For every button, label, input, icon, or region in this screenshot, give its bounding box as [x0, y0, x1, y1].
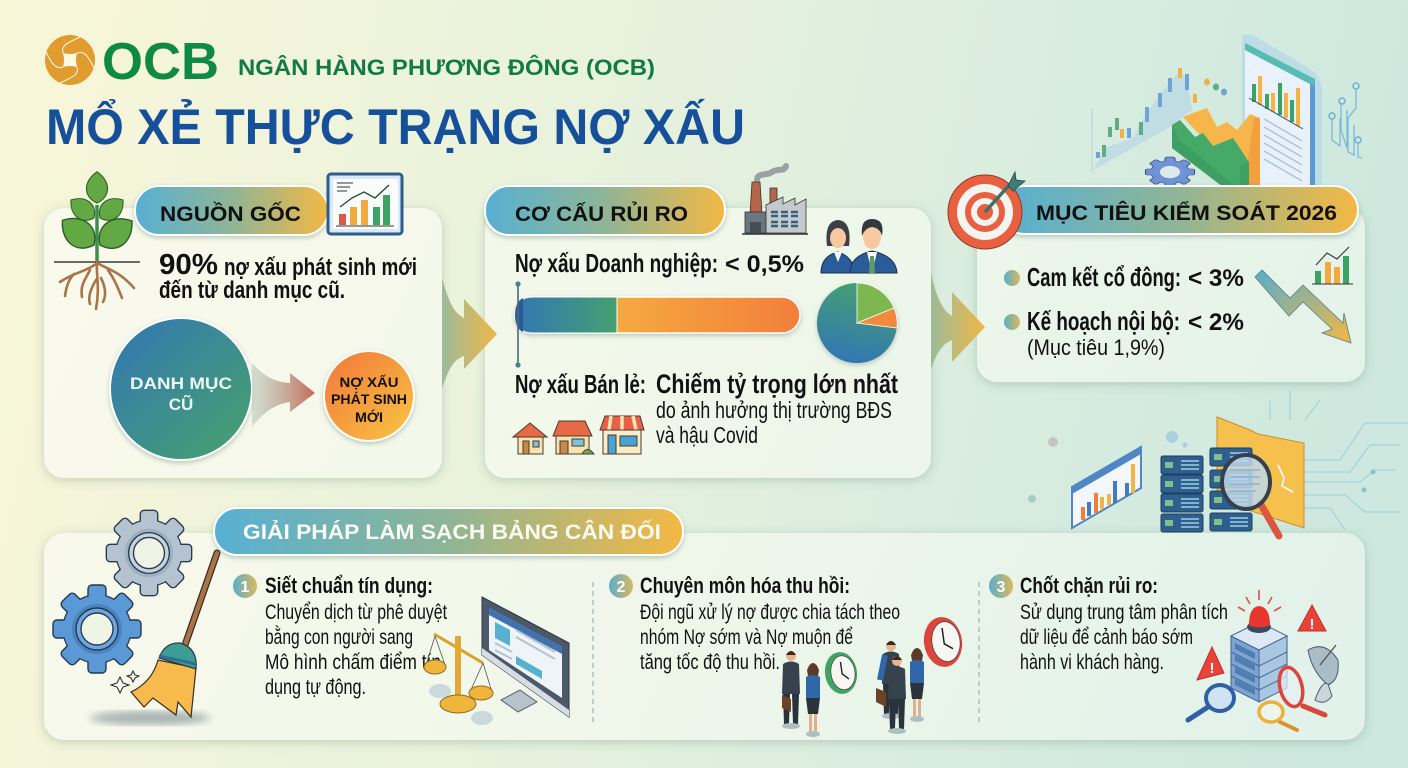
- arrow: cơ cấu to mục tiêu: [931, 273, 985, 370]
- step 1: siết chuẩn tín dụng: dụng tự động.: [265, 676, 366, 699]
- logo: OCB: OCB: [102, 33, 219, 91]
- icon: houses and shop: [513, 416, 644, 454]
- circle: nợ xấu phát sinh mới: PHÁT SINH: [331, 392, 407, 407]
- circle: nợ xấu phát sinh mới: [324, 351, 414, 441]
- pie chart: [817, 283, 897, 363]
- arrow: downward trend: [1255, 270, 1351, 343]
- step 1: siết chuẩn tín dụng: Siết chuẩn tín dụng:: [265, 573, 433, 598]
- step 2: chuyên môn hóa thu hồi: nhóm Nợ sớm và Nợ muộn để: [640, 626, 853, 649]
- panel: cơ cấu rủi ro: [485, 166, 931, 478]
- pill heading: giải pháp làm sạch bảng cân đối: GIẢI PHÁP LÀM SẠCH BẢNG CÂN ĐỐI: [243, 520, 661, 544]
- panel: nguồn gốc: [44, 172, 442, 478]
- text: nợ xấu bán lẻ: và hậu Covid: [656, 422, 758, 448]
- step 1: siết chuẩn tín dụng: Chuyển dịch từ phê duyệt: [265, 601, 447, 624]
- circle: nợ xấu phát sinh mới: MỚI: [355, 410, 383, 425]
- circle: danh mục cũ: DANH MỤC: [130, 374, 232, 393]
- icon: mini bar chart: [1312, 247, 1353, 284]
- circle: danh mục cũ: [110, 318, 252, 460]
- stacked bar: tỷ trọng nợ xấu: [515, 281, 800, 368]
- step 2: chuyên môn hóa thu hồi: Chuyên môn hóa thu hồi:: [640, 573, 850, 598]
- icon: factory: [742, 166, 808, 234]
- icon: alarm server and magnifiers: !: [1210, 660, 1214, 677]
- text: nợ xấu bán lẻ: [515, 369, 898, 448]
- panel: giải pháp: [44, 508, 1365, 740]
- step 3: chốt chặn rủi ro: hành vi khách hàng.: [1020, 651, 1164, 674]
- bullet: kế hoạch nội bộ: (Mục tiêu 1,9%): [1027, 335, 1165, 360]
- pill heading: mục tiêu kiểm soát 2026: [1000, 186, 1358, 234]
- illustration: analytics tablet and charts: [1092, 34, 1362, 190]
- step 2: chuyên môn hóa thu hồi: tăng tốc độ thu hồi.: [640, 651, 780, 674]
- arrow: danh mục cũ to nợ xấu mới: [252, 363, 315, 427]
- step 2: chuyên môn hóa thu hồi: 2: [617, 579, 626, 596]
- bullet: kế hoạch nội bộ: Kế hoạch nội bộ:: [1027, 306, 1180, 336]
- arrow: nguồn gốc to cơ cấu: [442, 278, 497, 388]
- divider: [592, 582, 594, 722]
- text: 90% statement: 90%: [159, 249, 218, 281]
- icon: target with dart: [948, 172, 1025, 249]
- step 2: chuyên môn hóa thu hồi: [609, 573, 900, 674]
- text: nợ xấu doanh nghiệp: Nợ xấu Doanh nghiệp:: [515, 248, 718, 278]
- circle: nợ xấu phát sinh mới: NỢ XẤU: [340, 375, 398, 390]
- step 1: siết chuẩn tín dụng: bằng con người sang: [265, 626, 413, 649]
- circle: danh mục cũ: CŨ: [169, 394, 193, 414]
- step 1: siết chuẩn tín dụng: Mô hình chấm điểm tín: [265, 651, 441, 674]
- icon: gears: [53, 510, 192, 673]
- icon: people and clocks: [782, 615, 965, 737]
- bank name: NGÂN HÀNG PHƯƠNG ĐÔNG (OCB): [238, 55, 655, 80]
- pill heading: cơ cấu rủi ro: [485, 186, 725, 235]
- pill heading: giải pháp làm sạch bảng cân đối: [214, 508, 683, 555]
- bullet: cam kết cổ đông: < 3%: [1188, 265, 1244, 292]
- text: 90% statement: [159, 249, 417, 304]
- step 3: chốt chặn rủi ro: Chốt chặn rủi ro:: [1020, 573, 1158, 598]
- pill heading: mục tiêu kiểm soát 2026: MỤC TIÊU KIỂM SOÁT 2026: [1036, 201, 1337, 225]
- text: 90% statement: đến từ danh mục cũ.: [159, 277, 345, 304]
- icon group: server folder and dashboard: [1028, 390, 1408, 536]
- pill heading: cơ cấu rủi ro: CƠ CẤU RỦI RO: [515, 202, 688, 226]
- step 1: siết chuẩn tín dụng: 1: [241, 579, 250, 596]
- step 3: chốt chặn rủi ro: 3: [997, 579, 1006, 596]
- icon: plant with roots: [54, 172, 140, 309]
- logo: OCB: [45, 33, 219, 91]
- text: nợ xấu bán lẻ: Nợ xấu Bán lẻ:: [515, 369, 646, 399]
- panel: mục tiêu kiểm soát: [948, 172, 1365, 382]
- pill heading: nguồn gốc: [135, 186, 328, 235]
- bullet: cam kết cổ đông: Cam kết cổ đông:: [1027, 262, 1181, 292]
- title: MỔ XẺ THỰC TRẠNG NỢ XẤU: [46, 98, 745, 155]
- divider: [978, 582, 980, 722]
- icon: broom: [90, 553, 217, 725]
- icon: alarm server and magnifiers: [1188, 590, 1338, 730]
- icon: scales and monitor: [424, 597, 569, 725]
- icon: business people: [821, 219, 897, 273]
- text: nợ xấu doanh nghiệp: < 0,5%: [725, 251, 804, 278]
- step 3: chốt chặn rủi ro: dữ liệu để cảnh báo sớm: [1020, 626, 1193, 649]
- icon: alarm server and magnifiers: !: [1310, 616, 1314, 633]
- icon: chart board: [328, 174, 402, 234]
- text: nợ xấu bán lẻ: Chiếm tỷ trọng lớn nhất: [656, 369, 898, 399]
- text: nợ xấu bán lẻ: do ảnh hưởng thị trường BĐS: [656, 397, 892, 423]
- step 3: chốt chặn rủi ro: [989, 573, 1228, 674]
- step 1: siết chuẩn tín dụng: [233, 573, 447, 699]
- pill heading: nguồn gốc: NGUỒN GỐC: [160, 202, 301, 226]
- bullet: kế hoạch nội bộ: < 2%: [1188, 309, 1244, 336]
- text: 90% statement: nợ xấu phát sinh mới: [224, 254, 417, 281]
- icon: magnifier handle over panel: [1263, 508, 1279, 536]
- step 3: chốt chặn rủi ro: Sử dụng trung tâm phân tích: [1020, 601, 1228, 624]
- bullet: kế hoạch nội bộ: [1004, 306, 1244, 360]
- step 2: chuyên môn hóa thu hồi: Đội ngũ xử lý nợ được chia tách theo: [640, 601, 900, 624]
